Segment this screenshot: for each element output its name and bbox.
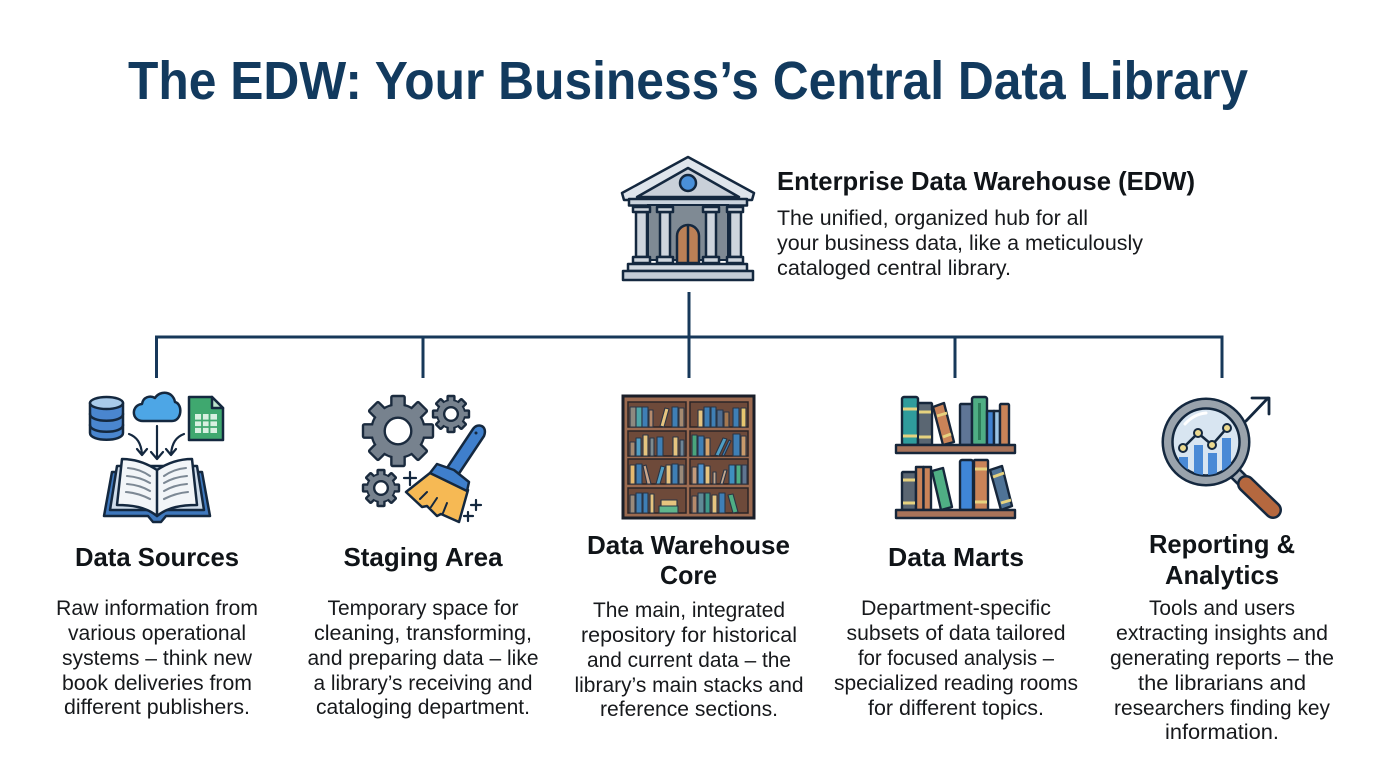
books row 1 (630, 407, 746, 427)
panel: data warehouse core (574, 396, 804, 721)
growth arrow (1246, 398, 1269, 421)
description: subsets of data tailored (846, 621, 1066, 645)
heading (587, 530, 790, 590)
database (90, 397, 123, 440)
connector tree (156, 292, 1222, 378)
description: Tools and users (1149, 596, 1295, 620)
description (308, 596, 538, 719)
description: The main, integrated (593, 598, 785, 622)
EDW description (777, 206, 1143, 280)
panel: data sources (56, 393, 258, 719)
lens (1163, 399, 1249, 485)
top shelf books (902, 397, 1009, 445)
heading: Data Marts (888, 542, 1024, 572)
EDW heading: Enterprise Data Warehouse (EDW) (777, 166, 1195, 196)
cloud (134, 393, 180, 421)
ferrule (430, 464, 469, 491)
bars (1179, 438, 1231, 479)
description: information. (1165, 720, 1279, 744)
description (574, 598, 804, 721)
bottom shelf books (902, 460, 1012, 510)
description (834, 596, 1078, 720)
description: repository for historical (581, 623, 797, 647)
description: cleaning, transforming, (314, 621, 532, 645)
icon: magnifier with chart (1163, 398, 1273, 510)
icon: bookcase (623, 396, 754, 518)
spreadsheet (189, 397, 223, 440)
columns (633, 207, 743, 263)
top shelf (896, 445, 1015, 453)
description: extracting insights and (1116, 621, 1328, 645)
description: Department-specific (861, 596, 1051, 620)
description: reference sections. (600, 697, 778, 721)
heading: Analytics (1165, 560, 1279, 590)
description (1110, 596, 1334, 744)
books row 2 (630, 434, 746, 456)
bristles (406, 473, 468, 522)
handle (1234, 472, 1246, 484)
title: The EDW: Your Business’s Central Data Library (128, 51, 1248, 111)
description: cataloging department. (316, 695, 530, 719)
books row 3 (630, 464, 747, 484)
open book (104, 472, 210, 522)
description: various operational (68, 621, 246, 645)
icon: library building (622, 157, 754, 280)
description: and preparing data – like (308, 646, 538, 670)
description (56, 596, 258, 719)
EDW description: your business data, like a meticulously (777, 231, 1143, 255)
broom handle (447, 425, 485, 475)
books row 4 (630, 493, 738, 513)
description: book deliveries from (62, 671, 252, 695)
EDW description: cataloged central library. (777, 256, 1011, 280)
heading: Data Sources (75, 542, 239, 572)
description: specialized reading rooms (834, 671, 1078, 695)
description: and current data – the (587, 648, 791, 672)
heading: Staging Area (344, 542, 503, 572)
description: different publishers. (64, 695, 250, 719)
description: a library’s receiving and (314, 671, 532, 695)
icon: sources flowing into book (90, 393, 223, 522)
sparkles (404, 472, 481, 521)
icon: book shelves (896, 397, 1015, 518)
description: for focused analysis – (858, 646, 1054, 670)
trend line (1179, 424, 1231, 452)
roof (622, 157, 754, 200)
description: the librarians and (1138, 671, 1306, 695)
description: systems – think new (62, 646, 252, 670)
heading: Data Warehouse (587, 530, 790, 560)
panel: reporting and analytics (1110, 398, 1334, 744)
heading: Reporting & (1149, 529, 1295, 559)
description: Raw information from (56, 596, 258, 620)
description: generating reports – the (1110, 646, 1334, 670)
description: Temporary space for (328, 596, 518, 620)
panel: staging area (308, 396, 538, 719)
heading: Core (660, 560, 717, 590)
EDW description: The unified, organized hub for all (777, 206, 1088, 230)
description: researchers finding key (1114, 696, 1330, 720)
heading (1149, 529, 1295, 590)
bottom shelf (896, 510, 1015, 518)
icon: gears and broom (363, 396, 485, 522)
description: for different topics. (868, 696, 1044, 720)
description: library’s main stacks and (574, 673, 804, 697)
door (677, 225, 699, 263)
arrows (129, 426, 184, 459)
steps (628, 264, 747, 271)
panel: data marts (834, 397, 1078, 720)
